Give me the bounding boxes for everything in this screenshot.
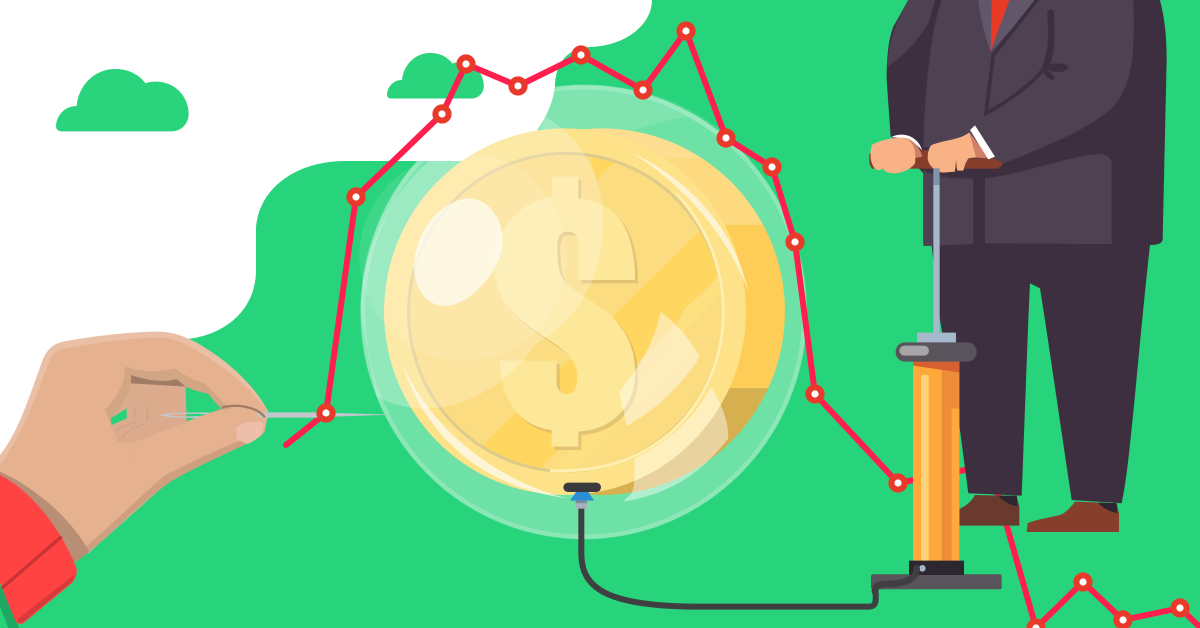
necktie xyxy=(991,0,1009,52)
right glint xyxy=(619,312,700,426)
finger shade xyxy=(105,367,233,443)
inner left reflection xyxy=(359,153,567,361)
needle xyxy=(267,412,393,418)
hand holding needle xyxy=(0,332,270,628)
barrel shade xyxy=(942,367,959,561)
thumb outline xyxy=(222,406,265,417)
coin ring xyxy=(409,153,723,471)
hand main xyxy=(0,338,267,573)
pump barrel xyxy=(913,360,959,561)
left hand xyxy=(871,138,915,173)
finger wrinkles xyxy=(115,405,148,438)
red cuff xyxy=(0,475,77,624)
gold coin xyxy=(384,127,787,498)
coin inner disk xyxy=(442,156,721,469)
undersleeve xyxy=(0,587,19,628)
lower right glint xyxy=(623,387,728,502)
hose knob xyxy=(919,565,926,572)
jacket xyxy=(887,0,1167,246)
left hand wrist shade xyxy=(903,138,922,158)
left shoe xyxy=(959,495,1019,526)
white sky shape xyxy=(0,0,652,470)
red price line chart xyxy=(286,31,1200,628)
oval glint xyxy=(414,198,503,306)
right sock xyxy=(1098,503,1117,513)
gap between fingers xyxy=(186,387,222,422)
cuff hem xyxy=(17,574,75,623)
air hose xyxy=(581,508,917,607)
lapel line xyxy=(986,0,1045,113)
needle eye xyxy=(160,413,270,418)
bubble valve xyxy=(563,483,601,509)
dollar sign xyxy=(494,177,638,450)
pump rod xyxy=(933,168,940,333)
cuff seam xyxy=(2,537,62,588)
right hand wrist shade xyxy=(969,132,990,158)
large left reflection xyxy=(361,113,603,409)
hose end xyxy=(875,568,917,592)
right shirt cuff xyxy=(970,125,995,159)
pump handle xyxy=(869,150,1003,169)
middle finger xyxy=(110,383,186,443)
lapel flower xyxy=(1042,63,1068,82)
upper right crescent xyxy=(632,153,748,292)
coin edge xyxy=(582,128,785,495)
pump base plate xyxy=(871,574,1002,589)
bubble reflections xyxy=(359,113,748,502)
chest pocket line xyxy=(1045,13,1051,68)
right hand xyxy=(928,132,976,173)
jacket front left xyxy=(923,170,973,246)
pump base block xyxy=(909,561,964,575)
soap bubble xyxy=(361,85,807,539)
barrel strip xyxy=(952,408,959,561)
jacket chest xyxy=(923,0,1134,163)
lapel xyxy=(978,0,1038,52)
line chart nodes xyxy=(319,24,1187,628)
gap in palm xyxy=(111,408,127,425)
finger crease xyxy=(131,375,186,387)
pump head xyxy=(896,342,977,362)
thumb xyxy=(133,408,265,477)
head highlight xyxy=(899,346,929,356)
barrel highlight xyxy=(921,375,929,561)
hand back xyxy=(0,332,268,573)
coin face xyxy=(384,128,746,495)
wrist shade xyxy=(0,472,89,562)
cloud left xyxy=(56,69,189,131)
thumb underside shade xyxy=(86,441,247,552)
left shirt cuff xyxy=(891,135,922,151)
right shoe xyxy=(1027,502,1119,532)
businessman xyxy=(869,0,1167,532)
left sock xyxy=(998,496,1017,507)
thumb nail xyxy=(236,422,264,445)
barrel collar xyxy=(913,360,959,372)
cloud centre xyxy=(387,53,484,98)
bicycle pump xyxy=(871,168,1002,592)
left sleeve highlight xyxy=(887,0,935,67)
lower left crescent xyxy=(402,362,567,498)
pump cap xyxy=(917,333,956,343)
jacket front right xyxy=(985,154,1112,244)
trousers xyxy=(932,245,1150,503)
